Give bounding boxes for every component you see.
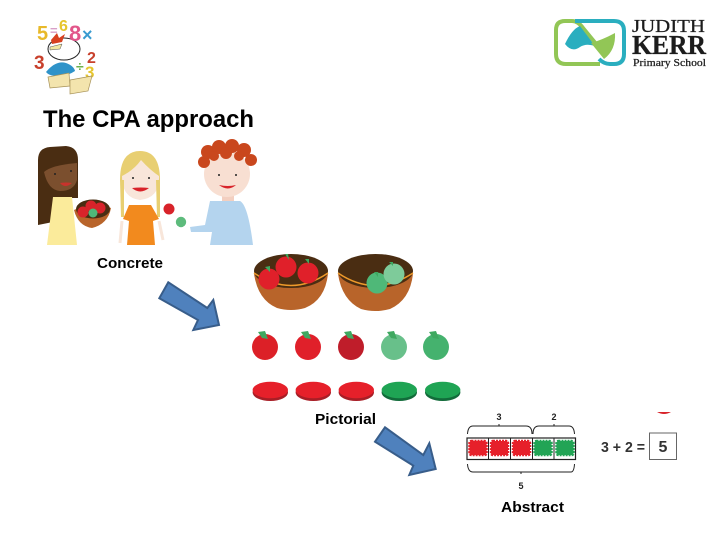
top bracket labels xyxy=(496,412,557,422)
bar model xyxy=(467,412,576,491)
label: Concrete: Concrete xyxy=(97,256,163,272)
red fragment xyxy=(657,412,671,414)
icon: maths doodle: 3 xyxy=(85,63,94,82)
label: Abstract: Abstract xyxy=(501,500,564,516)
logo mark xyxy=(556,21,624,64)
logo text: Primary School xyxy=(633,57,706,69)
arrow: pictorial to abstract xyxy=(375,427,436,475)
icon: maths doodle xyxy=(34,18,96,94)
logo text xyxy=(632,16,706,69)
title: The CPA approach xyxy=(43,106,254,133)
icon: maths doodle: 8 xyxy=(69,21,81,46)
braces xyxy=(468,424,574,474)
icon: maths doodle: 6 xyxy=(59,18,68,35)
equation: 3 + 2 = 5: 5 xyxy=(659,439,668,456)
equation: 3 + 2 = 5 xyxy=(601,433,676,460)
top bracket labels: 3 xyxy=(496,412,502,422)
icon: maths doodle: 2 xyxy=(87,50,96,67)
logo text: JUDITH xyxy=(632,16,705,36)
row of counters xyxy=(253,382,460,401)
top bracket labels: 2 xyxy=(551,412,557,422)
cells xyxy=(467,438,576,460)
logo: Judith Kerr Primary School xyxy=(556,16,706,69)
red and green apples xyxy=(164,204,186,227)
child: girl with braids xyxy=(120,151,163,245)
row of apples xyxy=(252,331,449,360)
illustration: bowl of three red apples xyxy=(254,254,328,310)
icon: maths doodle: = xyxy=(50,23,58,38)
icon: maths doodle: × xyxy=(82,25,93,45)
bowl held by girl xyxy=(74,200,111,228)
equation: 3 + 2 = 5: 3 + 2 = xyxy=(601,439,645,456)
icon: maths doodle: 5 xyxy=(37,23,48,45)
logo text: KERR xyxy=(632,30,706,60)
label: Pictorial: Pictorial xyxy=(315,412,376,428)
arrow: concrete to pictorial xyxy=(159,282,219,330)
total label: 5 xyxy=(518,481,524,491)
illustration: bowl of two green apples xyxy=(338,254,413,311)
child: boy with curly hair xyxy=(190,139,257,245)
icon: maths doodle: ÷ xyxy=(76,58,84,74)
icon: maths doodle: 3 xyxy=(34,53,45,74)
child: girl with bowl xyxy=(38,146,78,245)
illustration: three children with apples xyxy=(38,139,257,245)
